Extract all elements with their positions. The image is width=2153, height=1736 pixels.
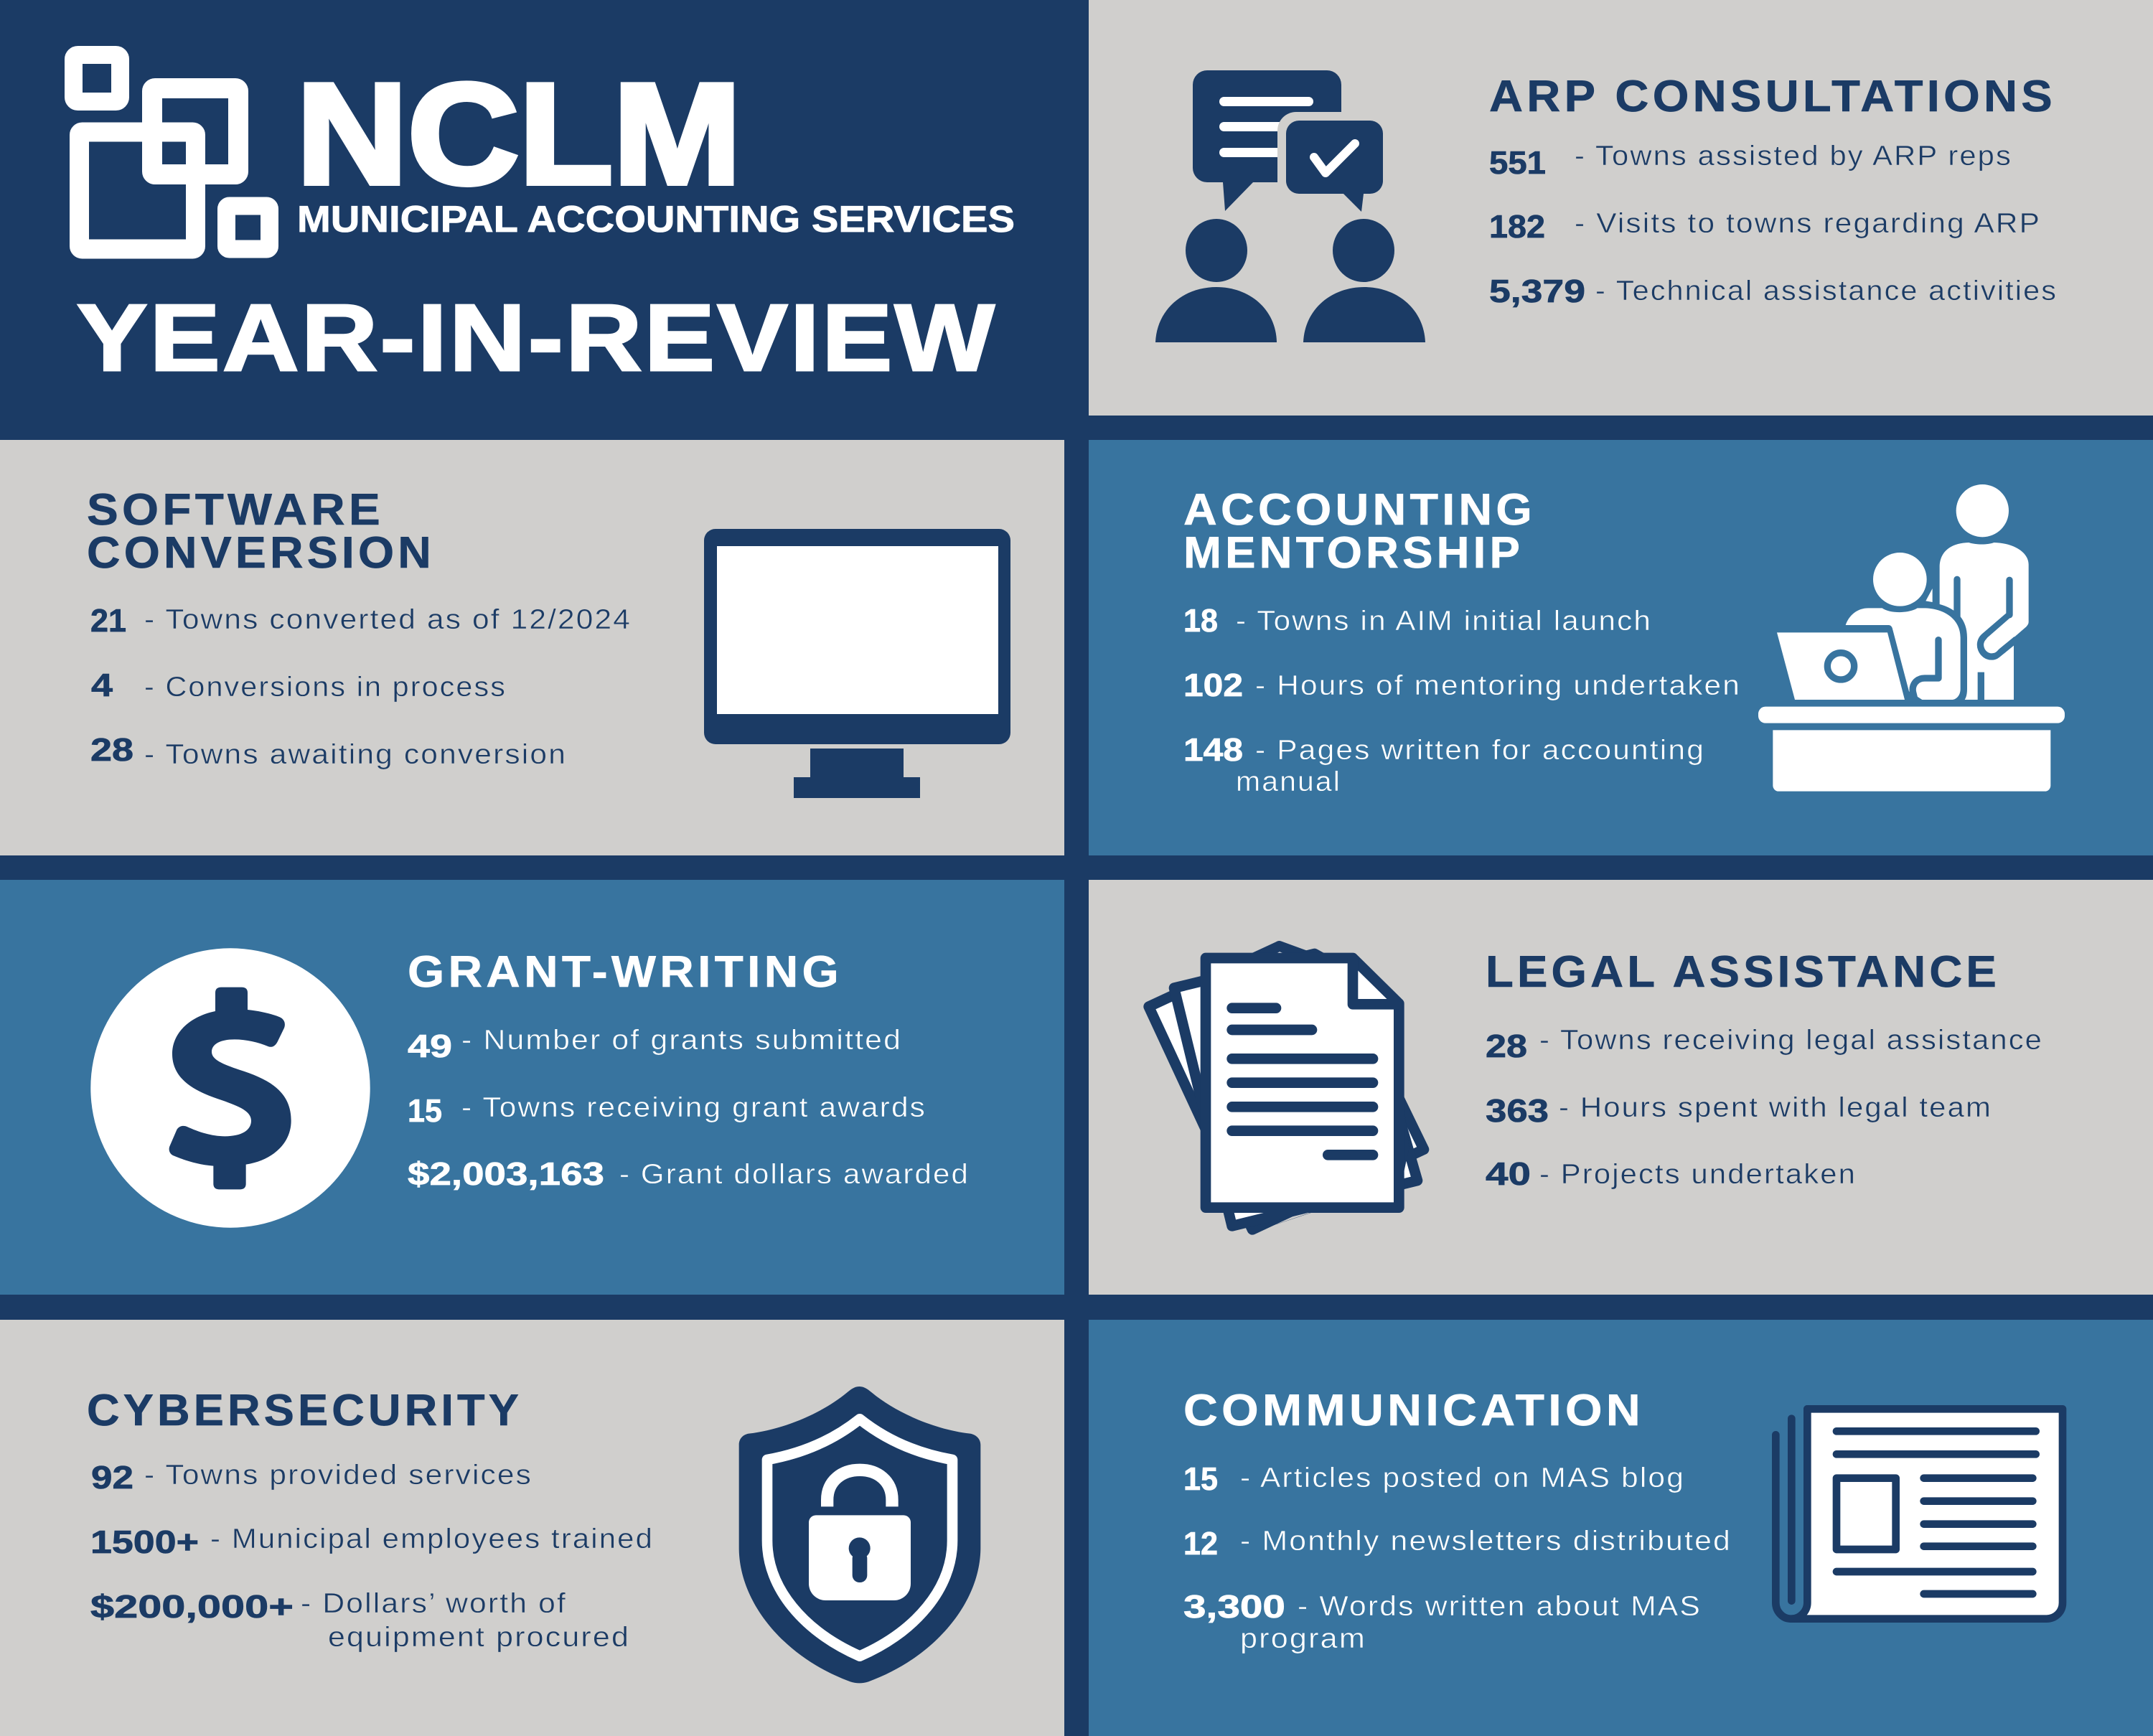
icon: NCLM logo squares <box>73 55 270 249</box>
stat: 4: 4 <box>91 667 113 703</box>
stat: 4 <box>91 667 507 703</box>
stat: 148: manual <box>1236 766 1341 797</box>
stat: 551: - Towns assisted by ARP reps <box>1575 141 2012 172</box>
stat: 1500+ <box>90 1524 654 1560</box>
stat: 18: 18 <box>1183 602 1218 639</box>
icon: newspaper <box>1776 1409 2063 1619</box>
stat: 551 <box>1489 141 2012 181</box>
stat: 363: - Hours spent with legal team <box>1559 1092 1992 1123</box>
stat: 12: - Monthly newsletters distributed <box>1240 1526 1732 1557</box>
panel: legal assistance <box>1089 880 2153 1295</box>
panel: accounting mentorship <box>1089 440 2153 855</box>
stat: $2,003,163: - Grant dollars awarded <box>619 1159 970 1190</box>
panel: ARP consultations <box>1089 0 2153 416</box>
stat: 148: 148 <box>1183 731 1243 768</box>
stat: 40: 40 <box>1486 1155 1531 1192</box>
heading <box>1183 485 1536 578</box>
stat: 148 <box>1183 731 1705 797</box>
stat: 1500+: - Municipal employees trained <box>210 1524 654 1554</box>
heading: SOFTWARE <box>87 485 384 535</box>
stat: 12 <box>1183 1525 1732 1562</box>
stat: 21: - Towns converted as of 12/2024 <box>144 604 632 635</box>
stat: 3,300: 3,300 <box>1183 1588 1285 1625</box>
icon: two people in conversation <box>1155 70 1425 342</box>
stat: 40 <box>1486 1155 1857 1192</box>
heading: COMMUNICATION <box>1183 1386 1644 1435</box>
stat: 40: - Projects undertaken <box>1539 1159 1857 1190</box>
stat: 102 <box>1183 667 1741 703</box>
stat: 28 <box>90 731 567 770</box>
stat: $200,000+ <box>90 1588 630 1653</box>
stat: $200,000+: $200,000+ <box>90 1588 294 1625</box>
panel: grant-writing <box>0 880 1064 1295</box>
stat: 5,379: - Technical assistance activities <box>1595 276 2058 306</box>
stat: 182: 182 <box>1489 208 1545 245</box>
stat: 102: - Hours of mentoring undertaken <box>1255 670 1741 701</box>
heading: ACCOUNTING <box>1183 485 1536 535</box>
stat: $2,003,163 <box>408 1155 970 1192</box>
stat: 363 <box>1486 1092 1992 1129</box>
heading: CONVERSION <box>87 528 435 578</box>
icon: mentor with seated person at laptop <box>1758 484 2065 792</box>
stat: 49: - Number of grants submitted <box>461 1025 902 1056</box>
icon: security shield with padlock <box>739 1387 980 1683</box>
stat: 28 <box>1486 1025 2043 1064</box>
stat: 92: 92 <box>91 1459 133 1496</box>
stat: 15: - Towns receiving grant awards <box>461 1092 927 1123</box>
stat: 28: 28 <box>90 731 133 768</box>
stat: 5,379 <box>1489 273 2058 309</box>
stat: 3,300 <box>1183 1588 1702 1654</box>
heading: CYBERSECURITY <box>87 1386 522 1435</box>
stat: 15: 15 <box>1183 1460 1218 1497</box>
heading: GRANT-WRITING <box>408 947 843 997</box>
stat: $200,000+: equipment procured <box>328 1622 630 1653</box>
stat: 28: - Towns awaiting conversion <box>144 739 567 770</box>
stat: 18: - Towns in AIM initial launch <box>1236 606 1652 637</box>
panel: software conversion <box>0 440 1064 855</box>
stat: 21 <box>90 602 632 639</box>
stat: 1500+: 1500+ <box>90 1524 199 1560</box>
stat: 49 <box>408 1025 902 1064</box>
heading: MENTORSHIP <box>1183 528 1524 578</box>
stat: $200,000+: - Dollars’ worth of <box>301 1588 567 1619</box>
panel: header <box>0 0 1089 440</box>
stat: 102: 102 <box>1183 667 1243 703</box>
stat: 5,379: 5,379 <box>1489 273 1585 309</box>
stat: 28: 28 <box>1486 1028 1527 1064</box>
stat: 182: - Visits to towns regarding ARP <box>1575 208 2041 239</box>
stat: 15: 15 <box>408 1092 442 1129</box>
stat: 148: - Pages written for accounting <box>1255 735 1705 766</box>
stat: 363: 363 <box>1486 1092 1549 1129</box>
heading <box>87 485 435 578</box>
subtitle: MUNICIPAL ACCOUNTING SERVICES <box>297 199 1015 240</box>
stat: 4: - Conversions in process <box>144 672 507 703</box>
heading: LEGAL ASSISTANCE <box>1486 947 2000 997</box>
title: NCLM: NCLM <box>296 55 741 214</box>
stat: 3,300: - Words written about MAS <box>1298 1591 1702 1622</box>
heading: ARP CONSULTATIONS <box>1489 72 2056 121</box>
stat: $2,003,163: $2,003,163 <box>408 1155 604 1192</box>
stat: 3,300: program <box>1240 1623 1366 1654</box>
stat: 12: 12 <box>1183 1525 1218 1562</box>
stat: 49: 49 <box>408 1028 452 1064</box>
stat: 18 <box>1183 602 1652 639</box>
panel: communication <box>1089 1320 2153 1736</box>
stat: 15: - Articles posted on MAS blog <box>1240 1463 1685 1493</box>
stat: 182 <box>1489 208 2041 245</box>
stat: 15 <box>1183 1460 1685 1497</box>
icon: dollar coin <box>90 948 370 1228</box>
panel: cybersecurity <box>0 1320 1064 1736</box>
stat: 92 <box>91 1459 533 1496</box>
title: year in review: YEAR-IN-REVIEW <box>77 285 997 390</box>
icon: stack of documents <box>1149 946 1424 1232</box>
stat: 28: - Towns receiving legal assistance <box>1539 1025 2043 1056</box>
stat: 92: - Towns provided services <box>144 1460 533 1491</box>
stat: 551: 551 <box>1489 144 1546 181</box>
stat: 21: 21 <box>90 602 126 639</box>
stat: 15 <box>408 1092 927 1129</box>
icon: computer monitor <box>704 529 1010 798</box>
